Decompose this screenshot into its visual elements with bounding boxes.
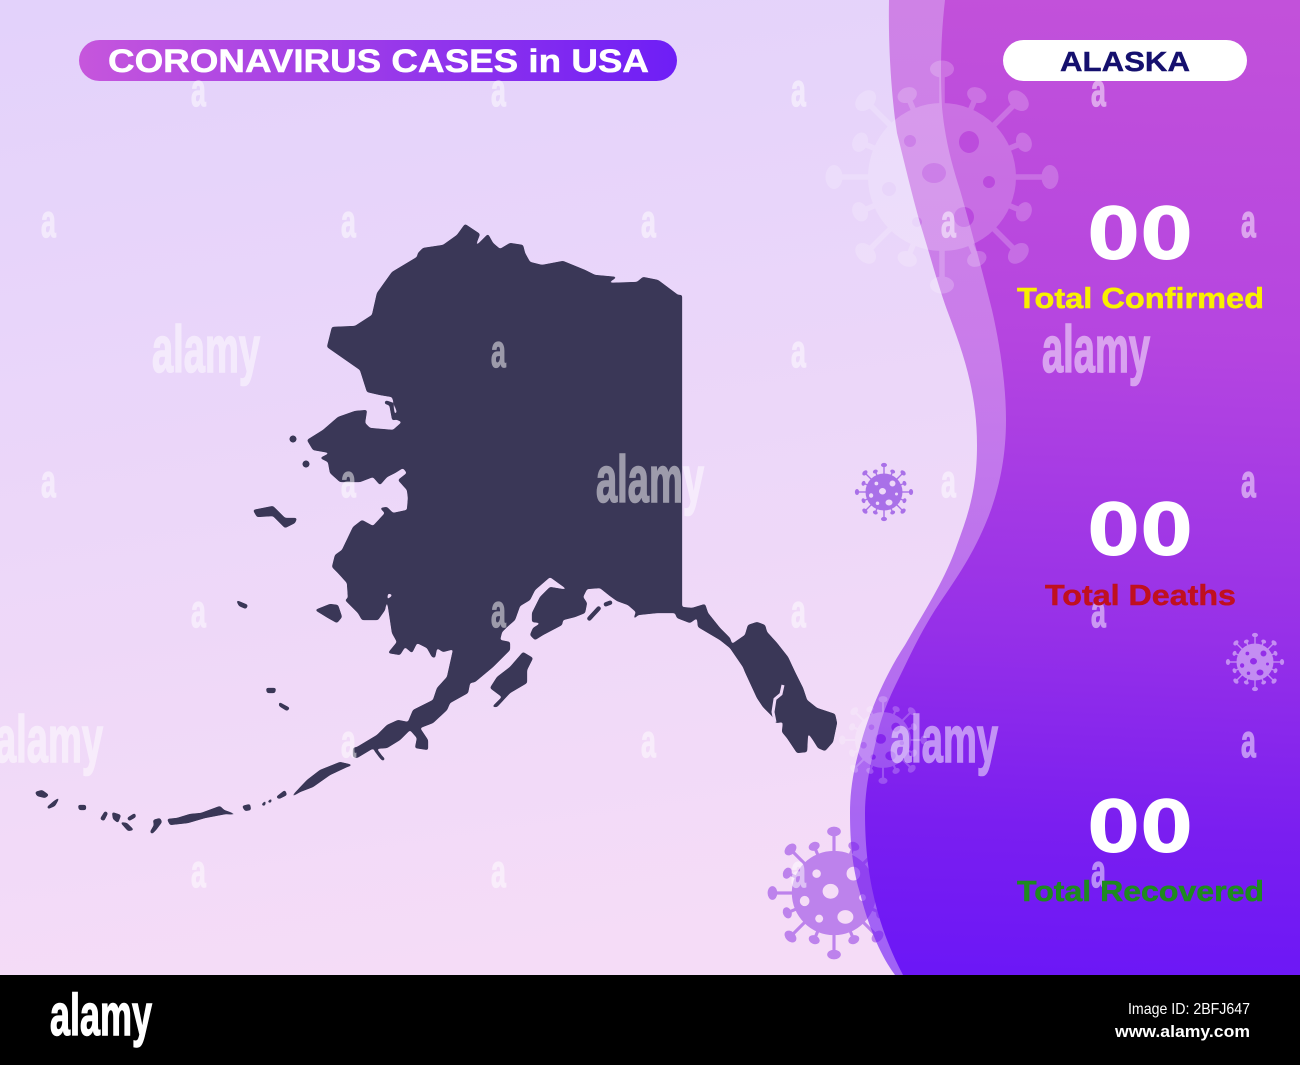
- panel: light wave band: [850, 0, 1300, 975]
- icon: virus bottom centre: [768, 827, 900, 959]
- stat: total deaths: Total Deaths: [1045, 580, 1236, 612]
- map: Montague strips: [588, 602, 612, 620]
- icon: small virus centre right: [855, 463, 913, 521]
- stat: total confirmed: [1017, 192, 1264, 315]
- watermark: small a marks: a: [491, 64, 507, 116]
- map: Nunivak island: [315, 604, 342, 623]
- map: coastal dots: [290, 436, 310, 468]
- map: mainland: [307, 224, 837, 758]
- watermark: small a marks: a: [791, 325, 807, 377]
- state pill: ALASKA: [1060, 46, 1190, 77]
- map: panhandle channel: [773, 685, 783, 722]
- watermark: small a marks: a: [1241, 195, 1257, 247]
- watermark: alamy words: alamy: [596, 442, 704, 516]
- watermark: small a marks: a: [791, 585, 807, 637]
- stat: total recovered: Total Recovered: [1017, 876, 1264, 908]
- watermark: small a marks: a: [1091, 64, 1107, 116]
- map: Alaska: [35, 224, 837, 834]
- watermark: alamy words: alamy: [0, 702, 103, 776]
- icon: translucent virus on wave edge: [839, 696, 927, 784]
- watermark: small a marks: a: [341, 195, 357, 247]
- stat: total confirmed: Total Confirmed: [1017, 283, 1264, 315]
- footer image id: Image ID: 2BFJ647: [1128, 1001, 1250, 1018]
- map: Aleutian chain centre: [167, 806, 238, 825]
- watermark: small a marks: [41, 64, 1257, 897]
- map: St Lawrence island: [253, 506, 297, 528]
- icon: small virus in panel: [1226, 633, 1284, 691]
- watermark: small a marks: a: [941, 455, 957, 507]
- stat: total deaths: 00: [1087, 488, 1193, 572]
- map: Aleutian chain east: [290, 762, 353, 798]
- stat: total recovered: 00: [1087, 785, 1193, 869]
- watermark: alamy words: alamy: [152, 312, 260, 386]
- watermark: small a marks: a: [491, 325, 507, 377]
- watermark: small a marks: a: [791, 64, 807, 116]
- watermark: small a marks: a: [1091, 845, 1107, 897]
- watermark: small a marks: a: [41, 455, 57, 507]
- watermark: small a marks: a: [641, 195, 657, 247]
- footer logo: alamy: [50, 983, 152, 1048]
- map: Aleutian chain west: [35, 790, 287, 834]
- title pill: [79, 40, 677, 81]
- watermark: alamy words: [0, 312, 1150, 776]
- watermark: small a marks: a: [341, 715, 357, 767]
- watermark: small a marks: a: [191, 585, 207, 637]
- watermark: small a marks: a: [191, 64, 207, 116]
- stat: total confirmed: 00: [1087, 192, 1193, 276]
- map: Kodiak island: [490, 652, 533, 707]
- state pill: [1003, 40, 1247, 81]
- watermark: alamy words: alamy: [1042, 312, 1150, 386]
- watermark: alamy words: alamy: [890, 702, 998, 776]
- watermark: small a marks: a: [191, 845, 207, 897]
- stat: total recovered: [1017, 785, 1264, 908]
- map: Baldwin peninsula: [385, 402, 394, 420]
- watermark: small a marks: a: [941, 195, 957, 247]
- map: small Bering islands: [236, 600, 290, 711]
- map: Aleutian hook: [375, 749, 384, 760]
- footer url: www.alamy.com: [1114, 1022, 1250, 1041]
- watermark: small a marks: a: [491, 845, 507, 897]
- icon: large translucent virus: [826, 60, 1058, 294]
- watermark: small a marks: a: [41, 195, 57, 247]
- watermark: small a marks: a: [1091, 585, 1107, 637]
- title pill: CORONAVIRUS CASES in USA: [108, 43, 649, 79]
- stat: total deaths: [1045, 488, 1236, 612]
- watermark: small a marks: a: [491, 585, 507, 637]
- watermark: small a marks: a: [1241, 715, 1257, 767]
- watermark: small a marks: a: [1241, 455, 1257, 507]
- watermark: small a marks: a: [641, 715, 657, 767]
- footer bar: [0, 975, 1300, 1065]
- watermark: small a marks: a: [341, 455, 357, 507]
- panel: statistics wave: [865, 0, 1300, 975]
- watermark: small a marks: a: [791, 845, 807, 897]
